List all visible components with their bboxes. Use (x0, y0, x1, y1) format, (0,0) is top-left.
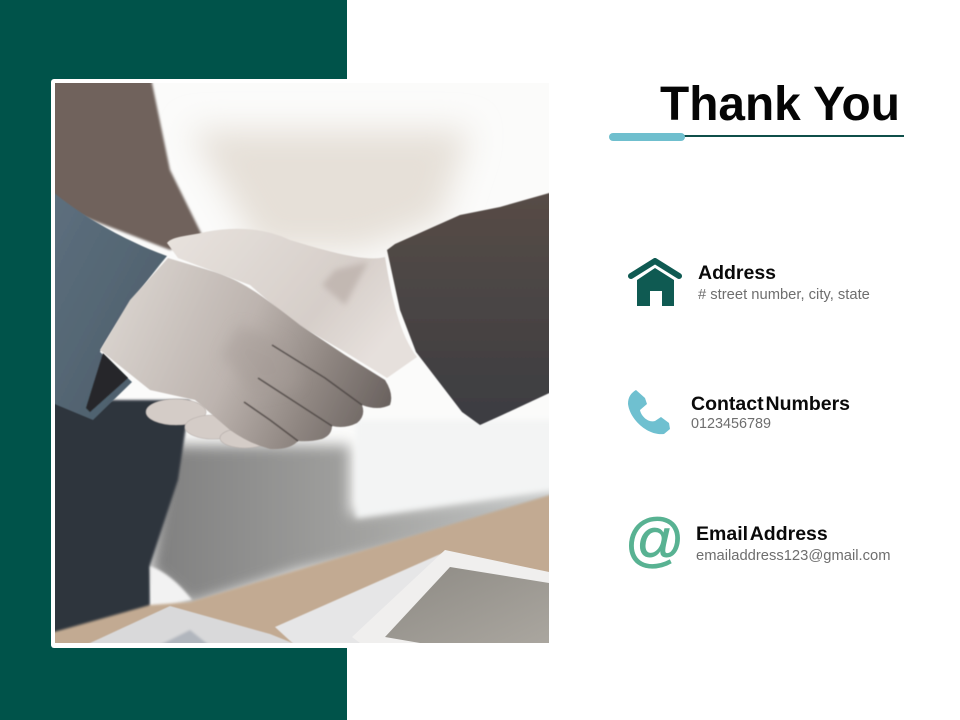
papers (75, 606, 310, 650)
address text: # street number, city, state (698, 287, 870, 303)
title: Thank You (660, 78, 900, 131)
palm shadow (322, 262, 368, 305)
bright window (356, 420, 560, 518)
icon: phone (628, 390, 670, 434)
contact: phone (628, 390, 850, 434)
handshake photo (55, 83, 549, 643)
title rule (684, 135, 904, 137)
sleeve inner (86, 353, 128, 412)
trousers (40, 400, 190, 636)
tablet (352, 550, 549, 643)
left person torso (40, 60, 202, 250)
white object (150, 566, 192, 606)
white photo frame (51, 79, 351, 648)
blurred room (150, 130, 560, 605)
icon: at sign: @ (625, 507, 685, 573)
right suit sleeve (387, 190, 560, 425)
right person hand (167, 229, 417, 378)
contact heading: Contact Numbers (691, 393, 850, 415)
blue sleeve (40, 180, 167, 420)
photo background (55, 83, 549, 643)
email text: emailaddress123@gmail.com (696, 548, 891, 564)
desk (40, 492, 560, 660)
email heading: Email Address (696, 523, 828, 545)
finger creases (244, 345, 362, 441)
icon: house (628, 258, 682, 306)
lower fingers (146, 399, 270, 448)
left person hand (100, 258, 391, 449)
green side panel (0, 0, 347, 720)
title accent pill (609, 133, 685, 141)
hand shading (222, 325, 300, 395)
contact text: 0123456789 (691, 416, 771, 432)
contact: address (628, 258, 870, 306)
address heading: Address (698, 262, 776, 284)
contact: email (625, 507, 891, 573)
